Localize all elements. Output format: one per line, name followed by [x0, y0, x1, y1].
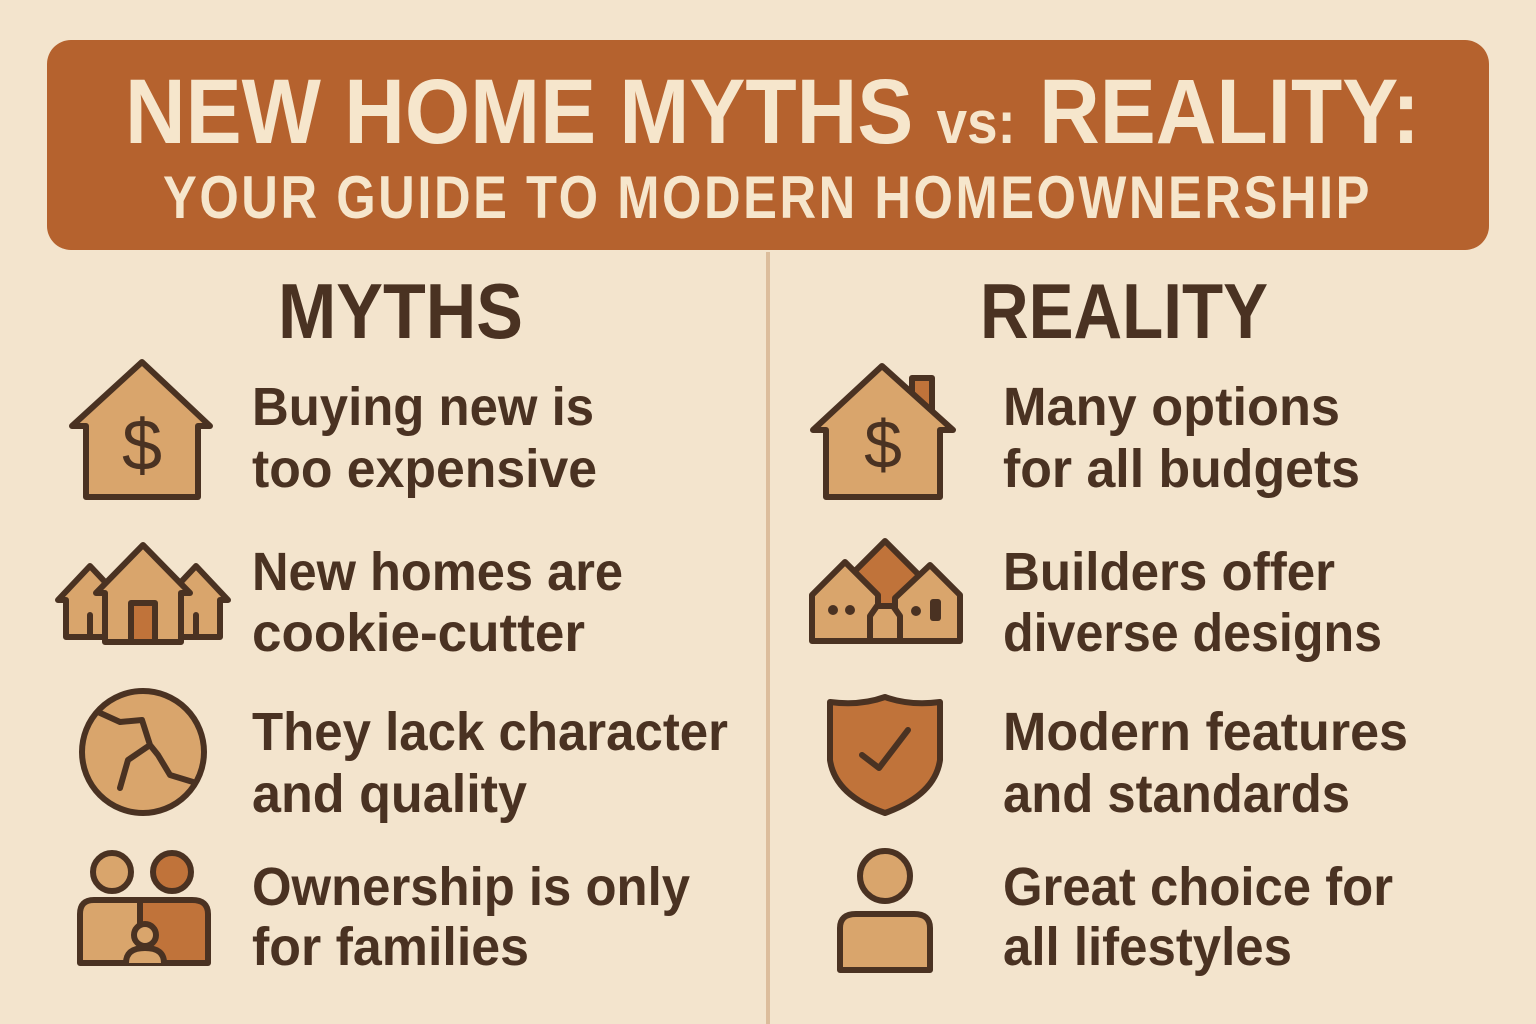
icon: shield with check	[830, 697, 940, 813]
icon: house with dollar	[72, 362, 210, 497]
reality 1 text: for all budgets	[1003, 439, 1360, 499]
title banner	[47, 40, 1489, 250]
reality 4 text: all lifestyles	[1003, 917, 1292, 977]
reality 4 text	[1003, 857, 1393, 977]
reality 1 text	[1003, 377, 1360, 499]
icon: house with chimney and dollar: $	[864, 407, 902, 483]
title: NEW HOME MYTHS vs: REALITY:	[125, 61, 1420, 163]
myth 1 text	[252, 377, 597, 499]
icon: person	[840, 851, 930, 970]
icon: house with chimney and dollar	[813, 366, 953, 497]
reality 1 text: Many options	[1003, 377, 1340, 437]
reality 2 text	[1003, 542, 1382, 663]
myth 3 text	[252, 702, 728, 824]
heading: myths: MYTHS	[278, 267, 523, 355]
myth 2 text: New homes are	[252, 542, 623, 602]
myth 2 text	[252, 542, 623, 663]
icon: row of houses	[58, 545, 228, 642]
icon: cracked circle	[82, 691, 204, 813]
myth 1 text: too expensive	[252, 439, 597, 499]
reality 4 text: Great choice for	[1003, 857, 1393, 917]
reality 3 text: and standards	[1003, 764, 1350, 824]
myth 4 text	[252, 857, 690, 977]
myth 4 text: for families	[252, 917, 529, 977]
reality 2 text: Builders offer	[1003, 542, 1335, 602]
icon: family	[80, 853, 208, 963]
myth 1 text: Buying new is	[252, 377, 594, 437]
myth 3 text: and quality	[252, 764, 527, 824]
heading: reality: REALITY	[980, 267, 1268, 355]
myth 2 text: cookie-cutter	[252, 603, 585, 663]
reality 3 text: Modern features	[1003, 702, 1408, 762]
reality 3 text	[1003, 702, 1408, 824]
icon: diverse houses	[812, 541, 960, 641]
reality 2 text: diverse designs	[1003, 603, 1382, 663]
icon: house with dollar: $	[122, 406, 162, 486]
myth 4 text: Ownership is only	[252, 857, 690, 917]
myth 3 text: They lack character	[252, 702, 728, 762]
